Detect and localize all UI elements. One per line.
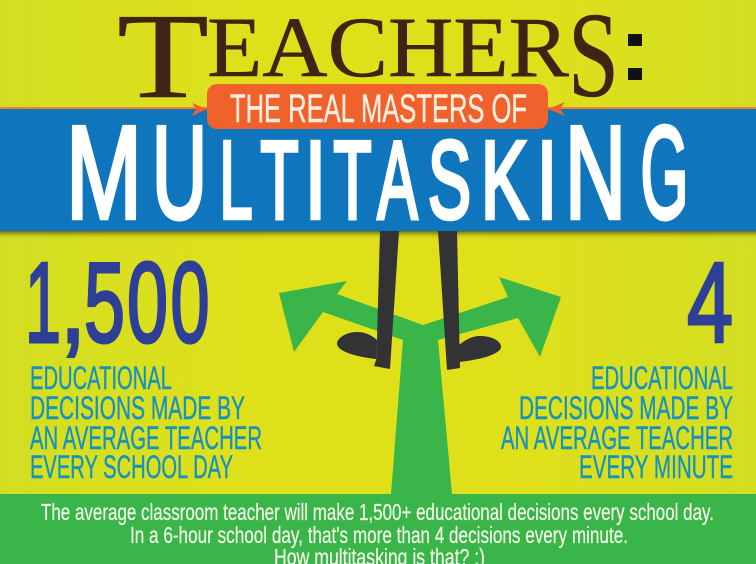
stat: 4: 4 [687, 240, 733, 367]
stat: 1,500: , [60, 240, 86, 367]
panel: footer [0, 494, 756, 564]
blue banner [0, 107, 756, 240]
stat: 1,500: 1 [25, 240, 61, 367]
heading: Multitasking: L [220, 119, 252, 242]
stat: 1,500: 0 [170, 240, 210, 367]
heading: Multitasking: N [565, 99, 626, 246]
heading: Multitasking: I [305, 119, 326, 242]
heading: Multitasking: M [66, 99, 142, 246]
heading: Multitasking: U [152, 99, 207, 246]
footer text [41, 499, 714, 564]
heading: Multitasking: A [378, 119, 418, 242]
subtitle pill: The real masters of: THE REAL MASTERS OF [230, 87, 527, 131]
heading: Multitasking: T [260, 119, 298, 242]
text block: left description [30, 360, 262, 485]
text block: left description: AN AVERAGE TEACHER [30, 420, 262, 456]
text block: left description: EVERY SCHOOL DAY [30, 449, 233, 485]
stat: 1,500: 0 [127, 240, 168, 367]
text block: right description [501, 360, 733, 485]
text block: left description: DECISIONS MADE BY [30, 390, 245, 426]
heading: Multitasking: I [537, 119, 557, 242]
text block: left description: EDUCATIONAL [30, 360, 172, 396]
heading: Multitasking: T [334, 119, 372, 242]
text: G [640, 99, 688, 246]
title: Teachers: EACHER [207, 0, 570, 95]
stat: 1,500: 5 [84, 240, 125, 367]
subtitle pill: The real masters of [192, 84, 565, 131]
heading: Multitasking: S [428, 119, 471, 242]
heading: Multitasking: K [481, 119, 528, 242]
icon: green forked arrow [279, 277, 561, 494]
title: Teachers [117, 0, 642, 124]
icon: legs and feet [337, 231, 501, 370]
